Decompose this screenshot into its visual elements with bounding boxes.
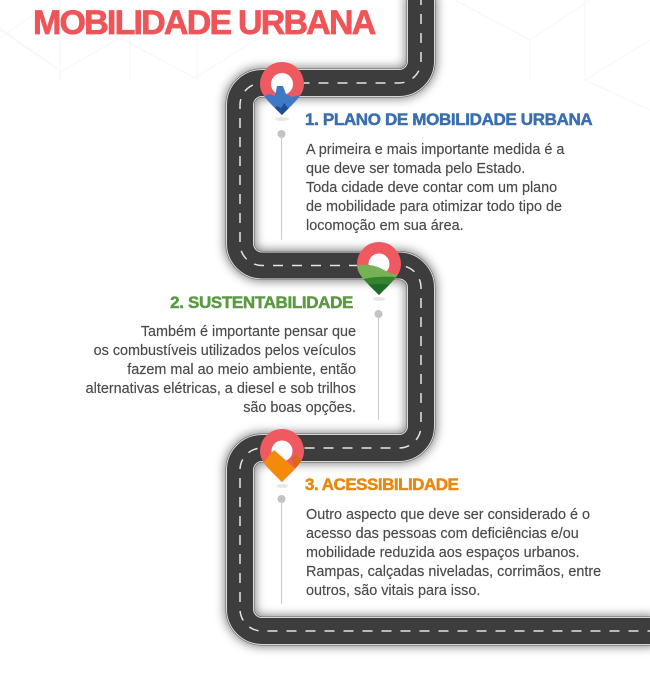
- text block 2: alternativas elétricas, a diesel e sob trilhos: [86, 381, 356, 397]
- timeline 1: [278, 130, 286, 240]
- text block 3: Rampas, calçadas niveladas, corrimãos, entre: [306, 564, 601, 580]
- text block 3: acesso das pessoas com deficiências e/ou: [306, 526, 579, 542]
- pin 2: landscape: [357, 242, 401, 301]
- text block 3: mobilidade reduzida aos espaços urbanos.: [306, 545, 580, 561]
- text block 2: Também é importante pensar que: [141, 324, 356, 340]
- text block 1: A primeira e mais importante medida é a: [306, 142, 564, 158]
- text block 1: que deve ser tomada pelo Estado.: [306, 161, 525, 177]
- text block 2: são boas opções.: [243, 400, 356, 416]
- text block 1: Toda cidade deve contar com um plano: [306, 180, 557, 196]
- background lines: [0, 0, 650, 110]
- text block 1: [306, 142, 564, 234]
- text block 2: fazem mal ao meio ambiente, então: [127, 362, 356, 378]
- road: [240, 0, 650, 631]
- text block 2: [86, 324, 356, 416]
- timeline 3: [278, 495, 286, 604]
- pin 3: accessibility: [260, 429, 304, 488]
- text block 3: [306, 507, 601, 599]
- timeline 2: [374, 310, 382, 420]
- title: MOBILIDADE URBANA: [33, 4, 374, 42]
- heading 1: 1. PLANO DE MOBILIDADE URBANA: [305, 110, 592, 129]
- heading 2: 2. SUSTENTABILIDADE: [170, 293, 353, 312]
- pin 1: city: [260, 62, 304, 121]
- text block 1: locomoção em sua área.: [306, 218, 464, 234]
- text block 3: outros, são vitais para isso.: [306, 583, 480, 599]
- text block 1: de mobilidade para otimizar todo tipo de: [306, 199, 562, 215]
- text block 3: Outro aspecto que deve ser considerado é o: [306, 507, 590, 523]
- heading 3: 3. ACESSIBILIDADE: [305, 475, 458, 494]
- text block 2: os combustíveis utilizados pelos veículos: [94, 343, 356, 359]
